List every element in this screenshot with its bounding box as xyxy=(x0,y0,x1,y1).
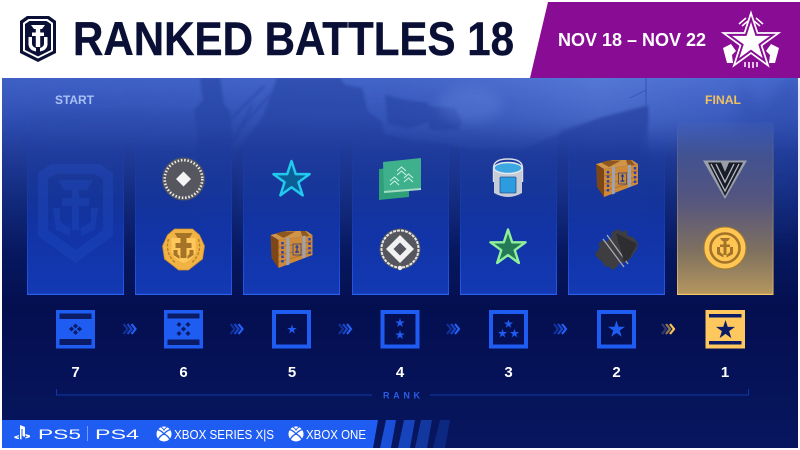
rank 6 badge xyxy=(164,310,203,348)
platform: xbox one: XBOX ONE xyxy=(306,427,366,442)
rank axis label: RANK xyxy=(383,390,420,400)
rank numbers: 5 xyxy=(288,364,296,381)
icon: green signal flags xyxy=(379,158,421,200)
label: final: FINAL xyxy=(705,93,741,107)
platform: playstation: PS4 xyxy=(95,426,139,442)
rank numbers: 3 xyxy=(504,364,513,381)
rank numbers: 1 xyxy=(721,364,729,381)
arrow: 6 to 5 xyxy=(230,324,242,334)
platform: xbox series: XBOX SERIES X|S xyxy=(174,427,274,442)
icon: wooden crate xyxy=(596,160,638,197)
rank numbers: 2 xyxy=(612,364,621,381)
rank 1 badge xyxy=(706,310,745,348)
rank 7 badge xyxy=(56,310,95,348)
icon: green star xyxy=(490,230,526,263)
icon: cyan star xyxy=(273,161,310,195)
icon: star emblem xyxy=(723,13,779,68)
title: RANKED BATTLES 18 xyxy=(73,12,514,65)
arrow: 2 to 1 gold xyxy=(662,324,674,334)
icon: dark armour plating xyxy=(595,229,638,270)
rank axis xyxy=(56,389,748,400)
rank 2 badge xyxy=(599,312,634,346)
label: start: START xyxy=(55,93,95,107)
platform: playstation: PS5 xyxy=(38,426,81,442)
bow of ship on right xyxy=(562,106,648,132)
icon: gold laurel emblem xyxy=(162,229,204,270)
rank 3 badge xyxy=(491,312,526,346)
panel: rank 6 rewards xyxy=(135,130,232,295)
arrow: 7 to 6 xyxy=(124,324,136,334)
rank 5 badge xyxy=(274,312,309,346)
icon: grey commemorative flag with diamond xyxy=(162,158,205,200)
icon: silver V insignia xyxy=(703,160,747,199)
icon: paint can xyxy=(494,159,522,197)
icon: anchor shield logo xyxy=(20,16,56,62)
date range: NOV 18 – NOV 22 xyxy=(558,29,706,50)
panel: rank 5 rewards xyxy=(243,130,340,295)
rank numbers: 4 xyxy=(396,364,405,381)
panel: rank 7 start xyxy=(27,130,124,295)
header: title bar xyxy=(20,12,514,65)
arrow: 5 to 4 xyxy=(339,324,351,334)
arrow: 3 to 2 xyxy=(554,324,566,334)
panel: final rank 1 rewards xyxy=(677,122,774,295)
panel: date banner xyxy=(530,2,800,78)
platform strip xyxy=(2,420,450,448)
arrow: 4 to 3 xyxy=(447,324,459,334)
rank numbers: 6 xyxy=(179,364,188,381)
panel: rank 2 rewards xyxy=(568,130,665,295)
rank 4 badge xyxy=(382,312,418,346)
rank numbers: 7 xyxy=(71,364,80,381)
icon: gold anchor coin xyxy=(704,227,746,269)
platform: playstation xyxy=(14,425,139,442)
decorative stripes xyxy=(380,420,450,448)
ship silhouette xyxy=(194,78,800,220)
panel: rank 3 rewards xyxy=(460,130,557,295)
icon: wooden crate xyxy=(270,231,312,268)
icon: faint shield xyxy=(38,164,113,263)
rank numbers xyxy=(71,364,729,381)
icon: grey diamond medal xyxy=(380,228,420,270)
panel: rank 4 rewards xyxy=(352,130,449,295)
platform: xbox one xyxy=(288,426,366,442)
